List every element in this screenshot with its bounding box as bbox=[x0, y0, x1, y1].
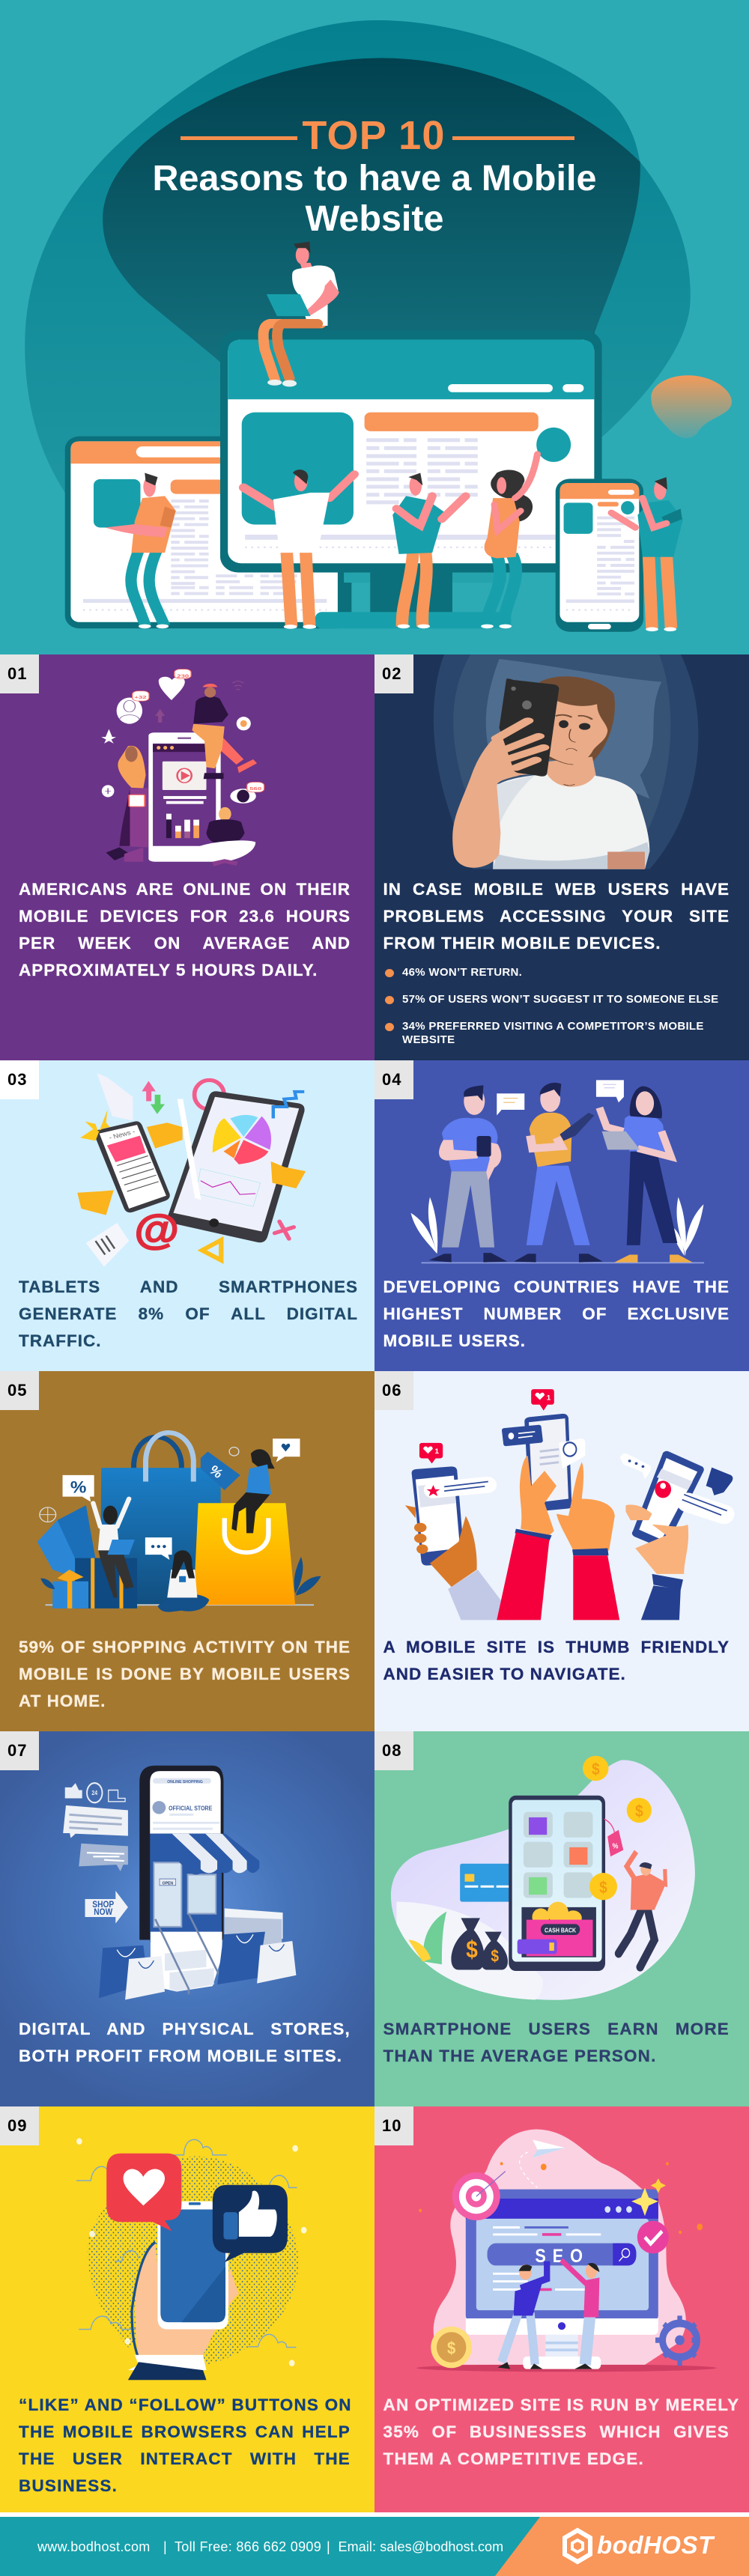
chat bubbles and icons bbox=[63, 1783, 128, 1871]
illustration: hands holding phones bbox=[405, 1389, 738, 1620]
seated woman bbox=[193, 807, 255, 866]
panel 04: indigo bbox=[374, 1060, 749, 1371]
text block 07 bbox=[19, 2020, 351, 2065]
text block 01: APPROXIMATELY 5 HOURS DAILY. bbox=[19, 961, 318, 979]
price tag bbox=[604, 1819, 623, 1856]
text block 05: AT HOME. bbox=[19, 1692, 106, 1710]
phone: - News - bbox=[108, 1128, 136, 1141]
text block 08: SMARTPHONE USERS EARN MORE bbox=[383, 2020, 730, 2038]
number badge 08 bbox=[374, 1731, 413, 1770]
text block 03: TABLETS AND SMARTPHONES bbox=[19, 1278, 358, 1296]
arm and phone bbox=[452, 678, 559, 868]
box and stairs bbox=[151, 1908, 283, 1994]
text block 01: AMERICANS ARE ONLINE ON THEIR bbox=[19, 880, 351, 899]
cheering person bbox=[619, 1852, 667, 1967]
text block 05: 59% OF SHOPPING ACTIVITY ON THE bbox=[19, 1638, 351, 1656]
title: TOP 10 with rules bbox=[181, 113, 574, 158]
left hand with phone bbox=[405, 1443, 516, 1620]
text block 01: PER WEEK ON AVERAGE AND bbox=[19, 934, 351, 953]
number badge 07 bbox=[0, 1731, 39, 1770]
chat bubbles and icons: 24 bbox=[91, 1790, 98, 1796]
person: right, clapping, teal shirt bbox=[611, 477, 683, 631]
footer contact: email: Email: sales@bodhost.com bbox=[339, 2539, 503, 2554]
footer orange logo area bbox=[495, 2517, 749, 2576]
illustration: phone device bbox=[556, 479, 643, 632]
text block 04: DEVELOPING COUNTRIES HAVE THE bbox=[383, 1278, 730, 1296]
speech bubble: percent bbox=[63, 1475, 94, 1501]
hand bbox=[135, 2242, 239, 2355]
illustration: monitor stand bbox=[315, 573, 511, 628]
shop now arrow: NOW bbox=[94, 1907, 113, 1917]
sparkles bbox=[76, 2138, 306, 2366]
money bags: $ bbox=[466, 1936, 478, 1963]
shopping bags bbox=[99, 1932, 296, 1999]
number badge 09: 09 bbox=[7, 2116, 27, 2135]
number badge 05 bbox=[0, 1371, 39, 1410]
shop now arrow bbox=[85, 1891, 128, 1924]
leaves bbox=[408, 1912, 446, 1964]
right hand with phone bbox=[620, 1451, 738, 1620]
text block 02: IN CASE MOBILE WEB USERS HAVE bbox=[383, 880, 730, 899]
text block 08: THAN THE AVERAGE PERSON. bbox=[383, 2047, 657, 2065]
decorative orange blob bbox=[651, 375, 732, 438]
number badge 06 bbox=[374, 1371, 413, 1410]
background blob: outer bbox=[25, 20, 691, 547]
text block 09 bbox=[19, 2396, 352, 2495]
text block 03: GENERATE 8% OF ALL DIGITAL bbox=[19, 1304, 358, 1323]
bullet: 57%: 57% OF USERS WON’T SUGGEST IT TO SOMEONE ELSE bbox=[402, 993, 718, 1006]
number badge 03 bbox=[0, 1060, 39, 1099]
person: centre, tablet bbox=[514, 1080, 624, 1263]
phone bbox=[157, 2202, 228, 2330]
panel 10: pink bbox=[374, 2106, 749, 2512]
left hand with phone: 1 bbox=[434, 1448, 440, 1456]
text block 02: PROBLEMS ACCESSING YOUR SITE bbox=[383, 907, 730, 926]
logo icon: hexagon bbox=[565, 2530, 590, 2562]
floating icons: heart, badges, avatar, star, eye, gear: +32 bbox=[134, 695, 147, 700]
phone body and screen bbox=[139, 1766, 223, 1942]
text block 03 bbox=[19, 1278, 358, 1350]
text block 05 bbox=[19, 1638, 351, 1710]
person: woman touching circle bbox=[481, 454, 537, 628]
illustration: phone storefront bbox=[63, 1766, 296, 1999]
phone bbox=[509, 1796, 605, 1971]
sleeve bbox=[128, 2362, 207, 2380]
illustration: tired man with phone in bed bbox=[434, 654, 698, 869]
text block 10: THEM A COMPETITIVE EDGE. bbox=[383, 2449, 644, 2468]
credit card bbox=[460, 1864, 518, 1902]
illustration: three people with devices bbox=[410, 1080, 704, 1263]
centre hands with phone bbox=[497, 1389, 619, 1620]
number badge 01: 01 bbox=[7, 664, 27, 683]
speech bubble: heart bbox=[273, 1439, 300, 1462]
tablet bbox=[168, 1091, 305, 1242]
person: pink shirt bbox=[561, 2260, 599, 2369]
number badge 03: 03 bbox=[7, 1070, 27, 1089]
illustration: hand with phone, heart and like bubbles bbox=[76, 2138, 306, 2380]
credit cards fan bbox=[37, 1505, 96, 1579]
phone: CASH BACK bbox=[545, 1927, 577, 1933]
phone bbox=[148, 732, 221, 862]
gear bbox=[655, 2315, 704, 2366]
money bags: $ bbox=[491, 1947, 500, 1966]
text block 07: DIGITAL AND PHYSICAL STORES, bbox=[19, 2020, 351, 2038]
text block 02 bbox=[383, 880, 730, 953]
panel 03: pale blue bbox=[0, 1060, 374, 1371]
floating icons: heart, badges, avatar, star, eye, gear: 230 bbox=[177, 673, 189, 679]
number badge 07: 07 bbox=[7, 1741, 27, 1760]
text block 10 bbox=[383, 2396, 739, 2468]
panel 09: yellow bbox=[0, 2106, 374, 2512]
text block 06 bbox=[383, 1638, 730, 1683]
coins bbox=[583, 1756, 652, 1900]
leaves and globes bbox=[40, 1448, 321, 1596]
coins: $ bbox=[635, 1802, 643, 1820]
number badge 06: 06 bbox=[382, 1381, 401, 1400]
blue bag: % bbox=[206, 1462, 226, 1481]
centre hands with phone: 1 bbox=[547, 1394, 551, 1402]
heart bubble bbox=[106, 2154, 181, 2232]
head and hair bbox=[540, 676, 615, 787]
illustration: tablet, phone, folders bbox=[77, 1073, 306, 1267]
bullet: 34%: WEBSITE bbox=[402, 1033, 455, 1046]
footer separator: | bbox=[163, 2539, 167, 2554]
text block 06: AND EASIER TO NAVIGATE. bbox=[383, 1665, 626, 1683]
text block 10: AN OPTIMIZED SITE IS RUN BY MERELY bbox=[383, 2396, 739, 2414]
person: holding block, orange shirt bbox=[105, 473, 176, 628]
panel 08: green bbox=[374, 1731, 749, 2106]
text block 01: MOBILE DEVICES FOR 23.6 HOURS bbox=[19, 907, 351, 926]
person: left, checked shirt bbox=[429, 1085, 524, 1263]
number badge 04 bbox=[374, 1060, 413, 1099]
text block 04: MOBILE USERS. bbox=[383, 1331, 526, 1350]
person: indigo shirt bbox=[498, 2261, 547, 2369]
text block 04: HIGHEST NUMBER OF EXCLUSIVE bbox=[383, 1304, 730, 1323]
price tag: % bbox=[612, 1842, 619, 1851]
text block 09: “LIKE” AND “FOLLOW” BUTTONS ON bbox=[19, 2396, 352, 2414]
number badge 09 bbox=[0, 2106, 39, 2145]
coins: $ bbox=[599, 1879, 607, 1897]
halftone dots bbox=[88, 2157, 299, 2365]
phone body and screen: ONLINE SHOPPING bbox=[167, 1780, 203, 1784]
footer logo wordmark: bodHOST bbox=[597, 2531, 714, 2559]
coin: $ bbox=[447, 2338, 455, 2358]
phone body and screen: OFFICIAL STORE bbox=[169, 1805, 212, 1812]
coin bbox=[431, 2327, 472, 2368]
title: subtitle bbox=[153, 158, 596, 239]
illustration: smartphone earnings bbox=[391, 1756, 695, 2000]
person: sitting on monitor with laptop bbox=[264, 242, 339, 386]
coins: $ bbox=[592, 1761, 600, 1778]
title: subtitle: Reasons to have a Mobile bbox=[153, 158, 596, 198]
text block 07: BOTH PROFIT FROM MOBILE SITES. bbox=[19, 2047, 342, 2065]
panel 05: brown bbox=[0, 1371, 374, 1731]
footer contact: phone: Toll Free: 866 662 0909 bbox=[175, 2539, 321, 2554]
illustration: SEO monitor and people bbox=[416, 2130, 717, 2372]
bullet: 34%: 34% PREFERRED VISITING A COMPETITOR’S MOBILE bbox=[402, 1020, 704, 1033]
number badge 02: 02 bbox=[382, 664, 401, 683]
folders bbox=[77, 1123, 306, 1215]
like bubble bbox=[213, 2185, 288, 2262]
blue bag bbox=[100, 1433, 240, 1604]
text block 10: 35% OF BUSINESSES WHICH GIVES bbox=[383, 2422, 730, 2441]
text block 05: MOBILE IS DONE BY MOBILE USERS bbox=[19, 1665, 351, 1683]
panel 02: navy bbox=[374, 654, 749, 1060]
shop now arrow: SHOP bbox=[92, 1900, 114, 1910]
paper plane bbox=[520, 2139, 565, 2187]
panel 01: purple bbox=[0, 654, 374, 1060]
person: right, glasses, laptop bbox=[599, 1086, 693, 1263]
monitor bbox=[466, 2190, 658, 2369]
text block 02: FROM THEIR MOBILE DEVICES. bbox=[383, 934, 661, 953]
bullet: 46%: 46% WON’T RETURN. bbox=[402, 966, 522, 979]
text block 04 bbox=[383, 1278, 730, 1350]
background blob: inner dark bbox=[103, 58, 640, 378]
text block 09: BUSINESS. bbox=[19, 2476, 118, 2495]
title: subtitle: Website bbox=[305, 198, 444, 239]
pink blob bbox=[434, 2130, 686, 2365]
target bbox=[452, 2172, 506, 2220]
illustration: desktop monitor bbox=[220, 330, 602, 573]
monitor: SEO bbox=[535, 2246, 589, 2266]
number badge 08: 08 bbox=[382, 1741, 401, 1760]
seated woman with phone bbox=[157, 1550, 209, 1612]
text block 08 bbox=[383, 2020, 730, 2065]
text block 06: A MOBILE SITE IS THUMB FRIENDLY bbox=[383, 1638, 730, 1656]
man with laptop on box bbox=[75, 1498, 137, 1609]
money bags bbox=[451, 1918, 508, 1969]
bullet: 34% bbox=[385, 1020, 704, 1046]
text block 09: THE USER INTERACT WITH THE bbox=[19, 2449, 351, 2468]
awning bbox=[151, 1834, 259, 1874]
illustration: shopping bags and shoppers bbox=[37, 1433, 321, 1612]
yellow bag bbox=[193, 1503, 295, 1605]
number badge 10: 10 bbox=[382, 2116, 401, 2135]
background halos and pillow bbox=[434, 654, 698, 869]
floating icons: heart, badges, avatar, star, eye, gear: 560 bbox=[249, 786, 262, 791]
number badge 01 bbox=[0, 654, 39, 693]
footer bar bbox=[0, 2517, 749, 2576]
person on phone top bbox=[192, 684, 257, 779]
text block 01 bbox=[19, 880, 351, 979]
woman with bag bbox=[106, 746, 148, 862]
at-sign icon: @ bbox=[134, 1206, 179, 1253]
person: centre, reaching arms up, white shirt bbox=[243, 470, 354, 629]
number badge 10 bbox=[374, 2106, 413, 2145]
illustration: tablet device bbox=[65, 437, 351, 628]
panel 06: pale bbox=[374, 1371, 749, 1731]
footer separator: | bbox=[327, 2539, 330, 2554]
illustration: social mobile users bbox=[101, 669, 264, 866]
panel 07: blue gradient bbox=[0, 1731, 374, 2106]
footer contact: website: www.bodhost.com bbox=[37, 2539, 151, 2554]
woman on yellow bag bbox=[231, 1449, 275, 1533]
stars and check badge bbox=[419, 2162, 703, 2253]
title: TOP 10 with rules: TOP 10 bbox=[302, 113, 446, 158]
panel: hero header bbox=[0, 0, 749, 654]
gift box bbox=[52, 1570, 88, 1609]
number badge 02 bbox=[374, 654, 413, 693]
text block 03: TRAFFIC. bbox=[19, 1331, 101, 1350]
floating icons: heart, badges, avatar, star, eye, gear bbox=[101, 669, 264, 804]
speech bubble: percent: % bbox=[70, 1478, 86, 1496]
person: clapping, teal shirt bbox=[392, 473, 466, 628]
speech bubble: dots bbox=[145, 1537, 172, 1560]
outline clouds bbox=[76, 2139, 297, 2348]
text block 09: THE MOBILE BROWSERS CAN HELP bbox=[19, 2422, 351, 2441]
shirt bbox=[493, 774, 649, 869]
number badge 04: 04 bbox=[382, 1070, 401, 1089]
phone body and screen: OPEN bbox=[163, 1881, 173, 1886]
number badge 05: 05 bbox=[7, 1381, 27, 1400]
phone bbox=[95, 1121, 170, 1212]
